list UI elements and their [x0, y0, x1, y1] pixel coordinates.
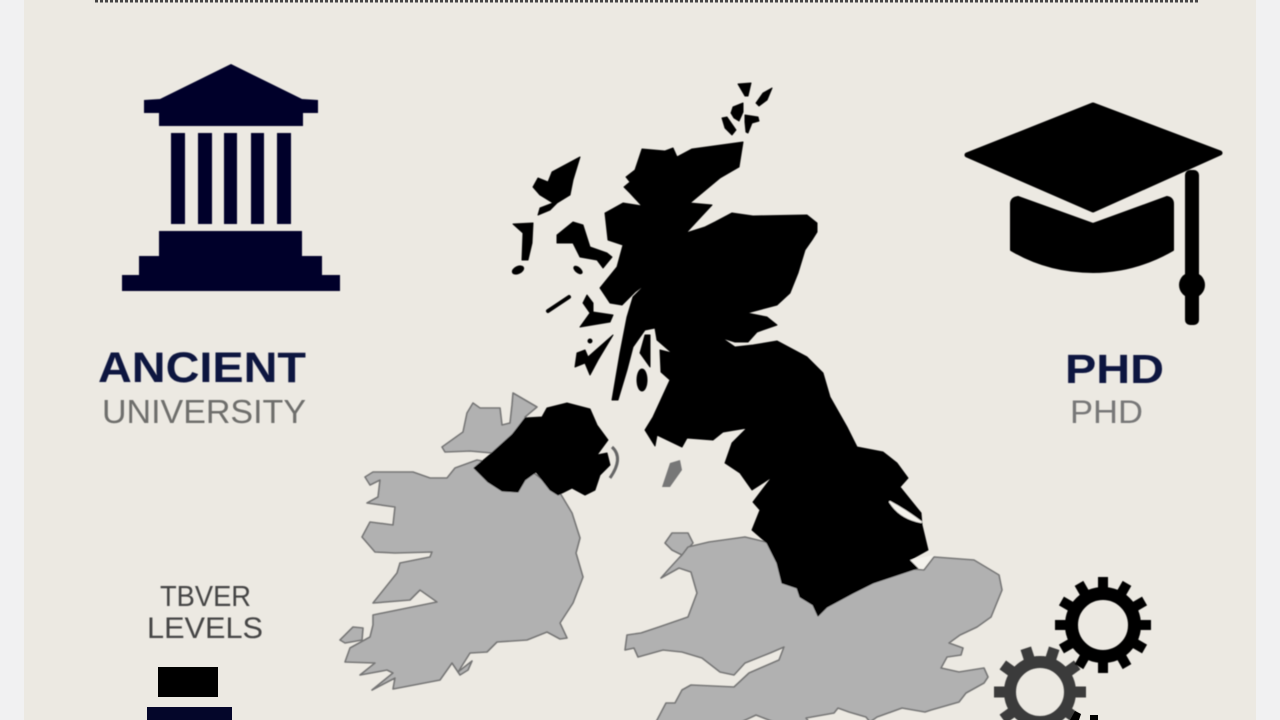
- heading: ancient university: ANCIENT: [98, 344, 306, 392]
- text block: tier levels: TBVER: [160, 581, 251, 613]
- icon: ancient university temple: [122, 64, 340, 291]
- icon: black gear: [1055, 577, 1151, 673]
- map region: Ireland: [340, 393, 583, 690]
- map region: Great Britain north highlighted: [600, 142, 934, 616]
- map region: England and Wales: [625, 533, 1002, 720]
- icon: graduation cap: [967, 105, 1220, 325]
- map region: Scottish islands: [511, 83, 772, 375]
- icon: stacked level blocks: [147, 667, 232, 720]
- map region: Isle of Man: [662, 460, 682, 487]
- heading: PhD: PHD: [1070, 394, 1143, 430]
- icon: grey gear: [994, 647, 1086, 720]
- icon: third gear teeth: [1070, 711, 1098, 720]
- map: British Isles: [340, 83, 1002, 720]
- text block: tier levels: [147, 581, 263, 645]
- map region: Northern Ireland: [474, 403, 618, 495]
- heading: PhD: PHD: [1065, 346, 1164, 392]
- text block: tier levels: LEVELS: [147, 612, 263, 645]
- heading: ancient university: UNIVERSITY: [102, 393, 306, 430]
- heading: PhD: [1065, 346, 1164, 430]
- heading: ancient university: [98, 344, 306, 430]
